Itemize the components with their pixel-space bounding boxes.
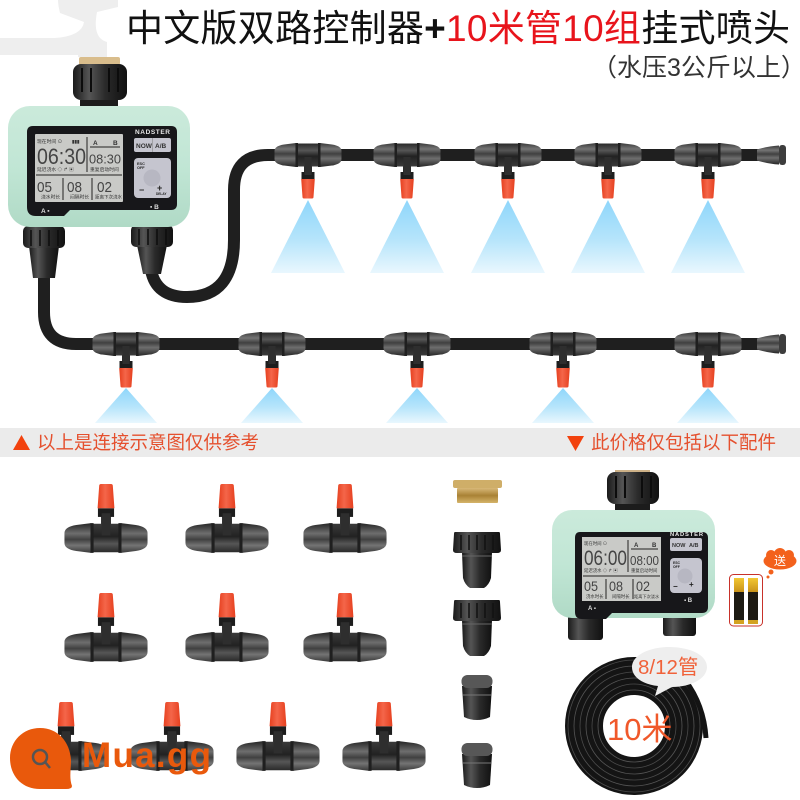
triangle up icon — [13, 435, 30, 450]
end plug part 1 — [462, 675, 492, 720]
accessory LCD: 05 — [584, 578, 598, 594]
outlet connector A — [23, 226, 65, 278]
lower tee 5 — [674, 332, 742, 388]
accessory LCD — [582, 537, 661, 601]
gift bubble — [764, 548, 796, 578]
control pad: + — [157, 183, 162, 193]
accessory housing — [552, 510, 715, 618]
upper tee 2 — [374, 143, 440, 198]
NOW and A/B buttons: NOW — [136, 143, 153, 150]
note: diagram for reference: 以上是连接示意图仅供参考 — [37, 432, 259, 453]
pipe B to upper row — [151, 155, 760, 297]
brand name: NADSTER — [135, 129, 170, 136]
accessory port A: A ▪ — [588, 606, 596, 612]
LCD screen: 间隔时长 — [70, 194, 89, 200]
LCD screen: 重复启动时间 — [90, 166, 119, 173]
part tee r2c1 — [64, 593, 148, 662]
part tee r2c3 — [303, 593, 387, 662]
controller: accessory — [552, 470, 715, 640]
lower tee 4 — [530, 332, 596, 388]
divider band — [0, 428, 800, 457]
control pad: DELAY — [156, 192, 167, 196]
LCD screen: 浇水时长 — [41, 194, 60, 200]
control pad — [134, 158, 171, 198]
upper tee 4 — [574, 143, 642, 198]
note: package contents: 此价格仅包括以下配件 — [591, 432, 776, 453]
accessory top connector — [607, 470, 659, 512]
control pad: − — [139, 185, 144, 195]
brass adapter — [453, 480, 502, 503]
batteries — [730, 574, 762, 626]
accessory brand: NADSTER — [670, 532, 704, 538]
LCD screen: 05 — [37, 179, 52, 196]
upper row spray cones — [271, 200, 745, 273]
LCD screen: 08:30 — [89, 152, 121, 166]
port labels: A ▪ — [41, 208, 50, 215]
NOW and A/B buttons: A/B — [155, 143, 166, 150]
accessory LCD: 间隔时长 — [612, 593, 630, 600]
controller: main diagram — [8, 57, 190, 278]
upper tee 5 — [674, 143, 742, 198]
faceplate — [27, 126, 177, 216]
part tee r3c4 — [342, 702, 426, 771]
accessory LCD: A — [634, 543, 639, 549]
lower tee 1 — [92, 332, 160, 388]
lower row spray cones — [95, 388, 739, 423]
LCD screen — [35, 134, 123, 202]
LCD screen: ▮▮▮ — [72, 139, 80, 144]
part tee r2c2 — [185, 593, 269, 662]
accessory pad: OFF — [673, 565, 680, 569]
hose coil — [568, 660, 706, 792]
title: 中文版双路控制器+10米管10组挂式喷头 — [126, 8, 790, 49]
lower row sprinklers — [92, 332, 786, 388]
upper tee 1 — [274, 143, 342, 198]
control pad: ESC — [137, 162, 145, 166]
accessory pad: ESC — [673, 561, 681, 565]
accessory pad — [670, 558, 702, 593]
part tee r1c1 — [64, 484, 148, 553]
upper row sprinklers — [274, 143, 786, 198]
accessory LCD: 延迟浇水 ◇ ↱ ▣ — [584, 567, 618, 574]
gift bubble: 送 — [774, 553, 786, 568]
accessory LCD: 02 — [636, 578, 650, 594]
accessory tees with nozzles — [24, 484, 426, 771]
lower end plug — [757, 334, 786, 354]
lower tee 3 — [384, 332, 450, 388]
accessory LCD: 08 — [609, 578, 623, 594]
faucet silhouette — [0, 0, 118, 57]
outlet connector B — [131, 225, 173, 274]
accessory port B: ▪ B — [684, 598, 693, 604]
accessory pad: − — [673, 582, 678, 591]
part tee r1c3 — [303, 484, 387, 553]
threaded outlet A — [568, 615, 603, 640]
part tee r3c1 — [24, 702, 108, 771]
accessory LCD: B — [652, 543, 657, 549]
upper tee 3 — [474, 143, 542, 198]
callout: pipe size: 8/12管 — [638, 656, 698, 679]
accessory faceplate — [575, 532, 708, 619]
accessory LCD: 浇水时长 — [586, 593, 604, 600]
part tee r3c2 — [130, 702, 214, 771]
LCD screen: 现在时间 ⊙ — [37, 138, 63, 145]
hose adapter 2 — [453, 600, 501, 656]
accessory buttons — [670, 538, 702, 551]
LCD screen: 06:30 — [37, 144, 86, 169]
LCD screen: A — [93, 140, 98, 147]
LCD screen: 距离下次浇水 — [95, 194, 122, 200]
control pad: OFF — [137, 166, 145, 170]
watermark logo — [10, 728, 72, 789]
accessory pad: + — [689, 580, 694, 589]
mint housing — [8, 106, 190, 227]
accessory LCD: 重复启动时间 — [631, 567, 657, 574]
upper end plug — [757, 145, 786, 165]
top inlet connector — [73, 57, 127, 108]
LCD screen: 02 — [97, 179, 112, 196]
hose length label: 10米 — [607, 712, 672, 747]
part tee r3c3 — [236, 702, 320, 771]
accessory buttons: A/B — [689, 543, 698, 549]
watermark text: Mua.gg — [82, 736, 211, 775]
hose adapter 1 — [453, 532, 501, 588]
callout: pipe size — [632, 647, 707, 696]
part tee r1c2 — [185, 484, 269, 553]
accessory LCD: 08:00 — [630, 553, 659, 568]
accessory LCD: 06:00 — [584, 547, 627, 570]
triangle down icon — [567, 436, 584, 451]
LCD screen: 08 — [67, 179, 82, 196]
accessory buttons: NOW — [672, 543, 686, 549]
LCD screen: 延迟浇水 ◇ ↱ ▣ — [37, 166, 74, 173]
lower tee 2 — [238, 332, 306, 388]
end plug part 2 — [462, 743, 492, 788]
port label B: ▪ B — [150, 204, 159, 211]
pipe A to lower row — [44, 275, 760, 344]
NOW and A/B buttons — [134, 138, 171, 152]
LCD screen: B — [113, 140, 118, 147]
subtitle: water pressure: （水压3公斤以上） — [592, 54, 800, 82]
accessory LCD: 现在时间 ⊙ — [584, 540, 607, 547]
threaded outlet B — [663, 611, 696, 636]
accessory LCD: 距离下次浇水 — [634, 593, 660, 600]
